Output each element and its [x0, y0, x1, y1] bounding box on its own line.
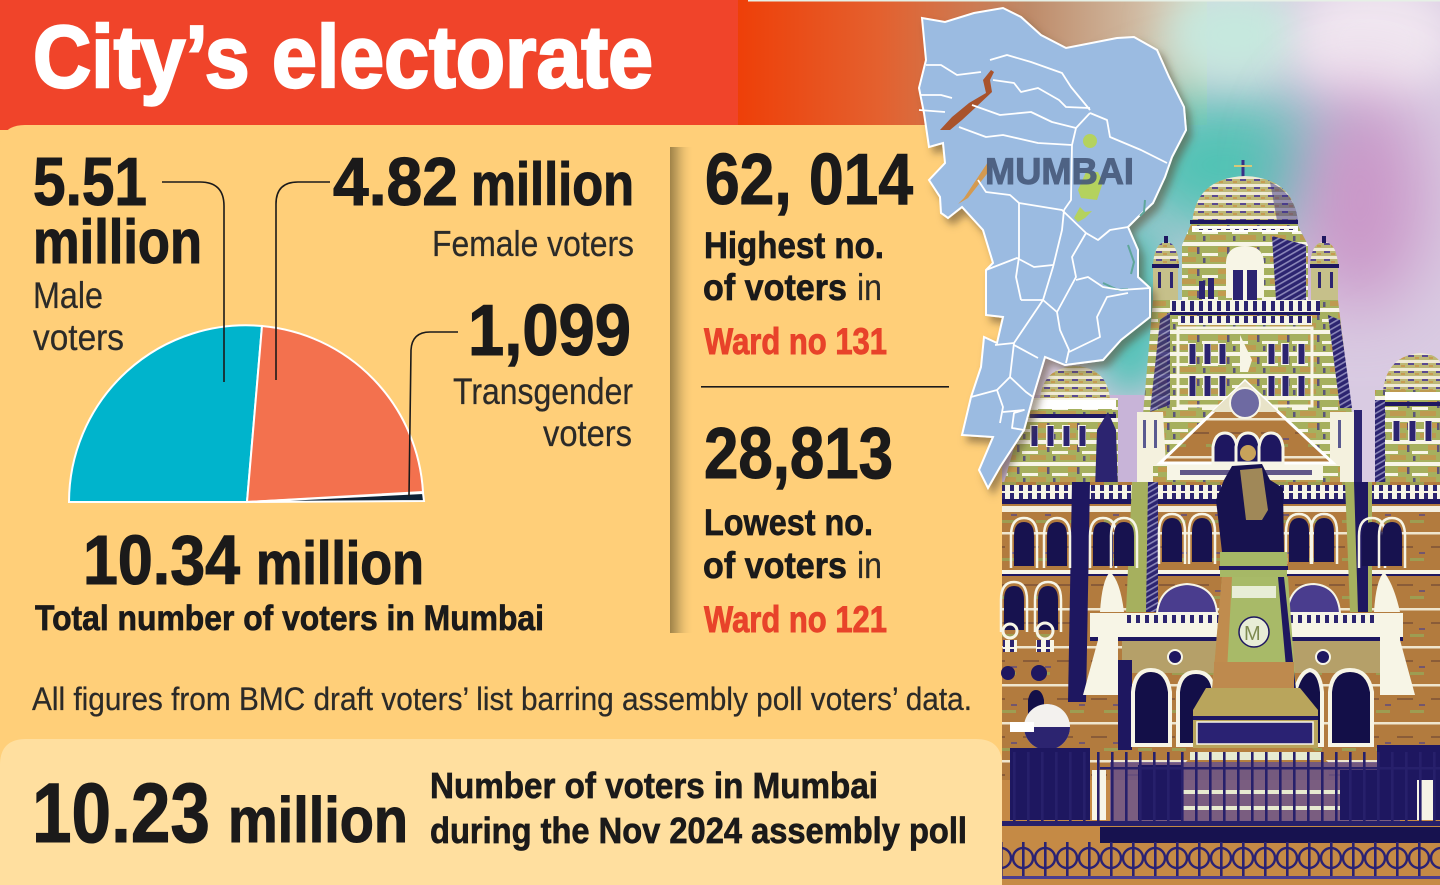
divider line [701, 386, 949, 388]
iron fence [1002, 752, 1440, 879]
white sculptures [1100, 572, 1400, 612]
stat: lowest ward: 28,813 [704, 414, 893, 494]
memorial pedestal [1186, 552, 1328, 822]
stat: transgender voters: voters [543, 413, 632, 454]
panel: assembly poll comparison [0, 739, 1002, 885]
stat: lowest ward: Ward no 121 [704, 599, 887, 640]
sky strip behind lower-left wing [1002, 395, 1152, 485]
purple steps [1110, 762, 1400, 822]
panel: assembly poll comparison: million [228, 784, 408, 856]
stat: highest ward: in [857, 267, 882, 308]
map label: MUMBAI [985, 151, 1134, 192]
stat: female voters [333, 144, 634, 264]
stat: total voters: Total number of voters in Mumbai [35, 599, 544, 638]
map outline [919, 8, 1186, 488]
statue [1216, 445, 1284, 552]
drum of central tower [1182, 220, 1308, 302]
stat: highest ward: Ward no 131 [704, 321, 887, 362]
forecourt [1002, 780, 1440, 885]
map: Mumbai wards [919, 8, 1186, 488]
corner turrets [1152, 236, 1339, 300]
stat: highest ward: of voters [703, 267, 847, 308]
stat: male voters: voters [33, 317, 124, 358]
memorial pedestal: M [1244, 623, 1261, 645]
lower facade [1001, 482, 1440, 782]
globe lamp [1010, 704, 1070, 750]
stat: transgender voters: Transgender [453, 371, 633, 412]
stat: female voters: 4.82 [333, 144, 458, 220]
stat: lowest ward: of voters [703, 545, 847, 586]
background: gradient wash behind map and building [737, 0, 1440, 885]
right wing [1375, 390, 1440, 490]
stat: highest ward: 62, 014 [705, 140, 913, 220]
chart: half pie of voters by gender [69, 325, 424, 502]
tidal inlets [1103, 200, 1145, 290]
left wing dome [1040, 366, 1110, 400]
ward boundaries [919, 55, 1167, 430]
stat: highest ward: Highest no. [704, 225, 884, 266]
creek [940, 70, 994, 130]
slice: male [69, 325, 262, 502]
stat: lowest ward: Lowest no. [704, 502, 873, 543]
stat: transgender voters: 1,099 [468, 291, 631, 371]
right wing dome [1383, 353, 1440, 392]
slice: transgender [247, 493, 424, 502]
building: BMC headquarters illustration [1001, 160, 1440, 885]
source note: All figures from BMC draft voters’ list barring assembly poll voters’ data. [32, 681, 972, 717]
pediment [1160, 381, 1333, 480]
panel: assembly poll comparison: Number of voters in Mumbai [430, 765, 878, 806]
title banner [0, 0, 738, 130]
stat: female voters: Female voters [432, 223, 634, 264]
panel: assembly poll comparison: 10.23 [32, 766, 210, 860]
creek south [958, 162, 990, 204]
panel: assembly poll comparison: during the Nov 2024 assembly poll [430, 810, 967, 851]
panel: main voter figures [0, 125, 1002, 885]
balcony [1083, 613, 1415, 750]
dark masses behind fence [1010, 745, 1440, 820]
stat: lowest ward [703, 414, 893, 640]
title: City’s electorate [33, 7, 653, 106]
tower body [1136, 300, 1362, 495]
stat: transgender voters [453, 291, 633, 454]
vertical divider [670, 147, 694, 633]
slice: female [247, 326, 423, 502]
left wing [1002, 398, 1118, 490]
stat: lowest ward: in [857, 545, 882, 586]
stat: male voters [33, 144, 202, 358]
stat: total voters: 10.34 [83, 521, 240, 599]
stat: male voters: 5.51 [33, 144, 147, 220]
main dome [1192, 160, 1298, 226]
leader lines [162, 182, 458, 496]
lower tower turrets [1137, 410, 1362, 498]
stat: female voters: million [471, 151, 634, 218]
stat: male voters: Male [33, 275, 103, 316]
stat: total voters [35, 521, 544, 638]
stat: male voters: million [33, 208, 202, 277]
ground floor arches [1133, 670, 1372, 745]
green patch [1074, 134, 1103, 222]
stat: total voters: million [256, 530, 424, 597]
stat: highest ward [703, 140, 913, 362]
